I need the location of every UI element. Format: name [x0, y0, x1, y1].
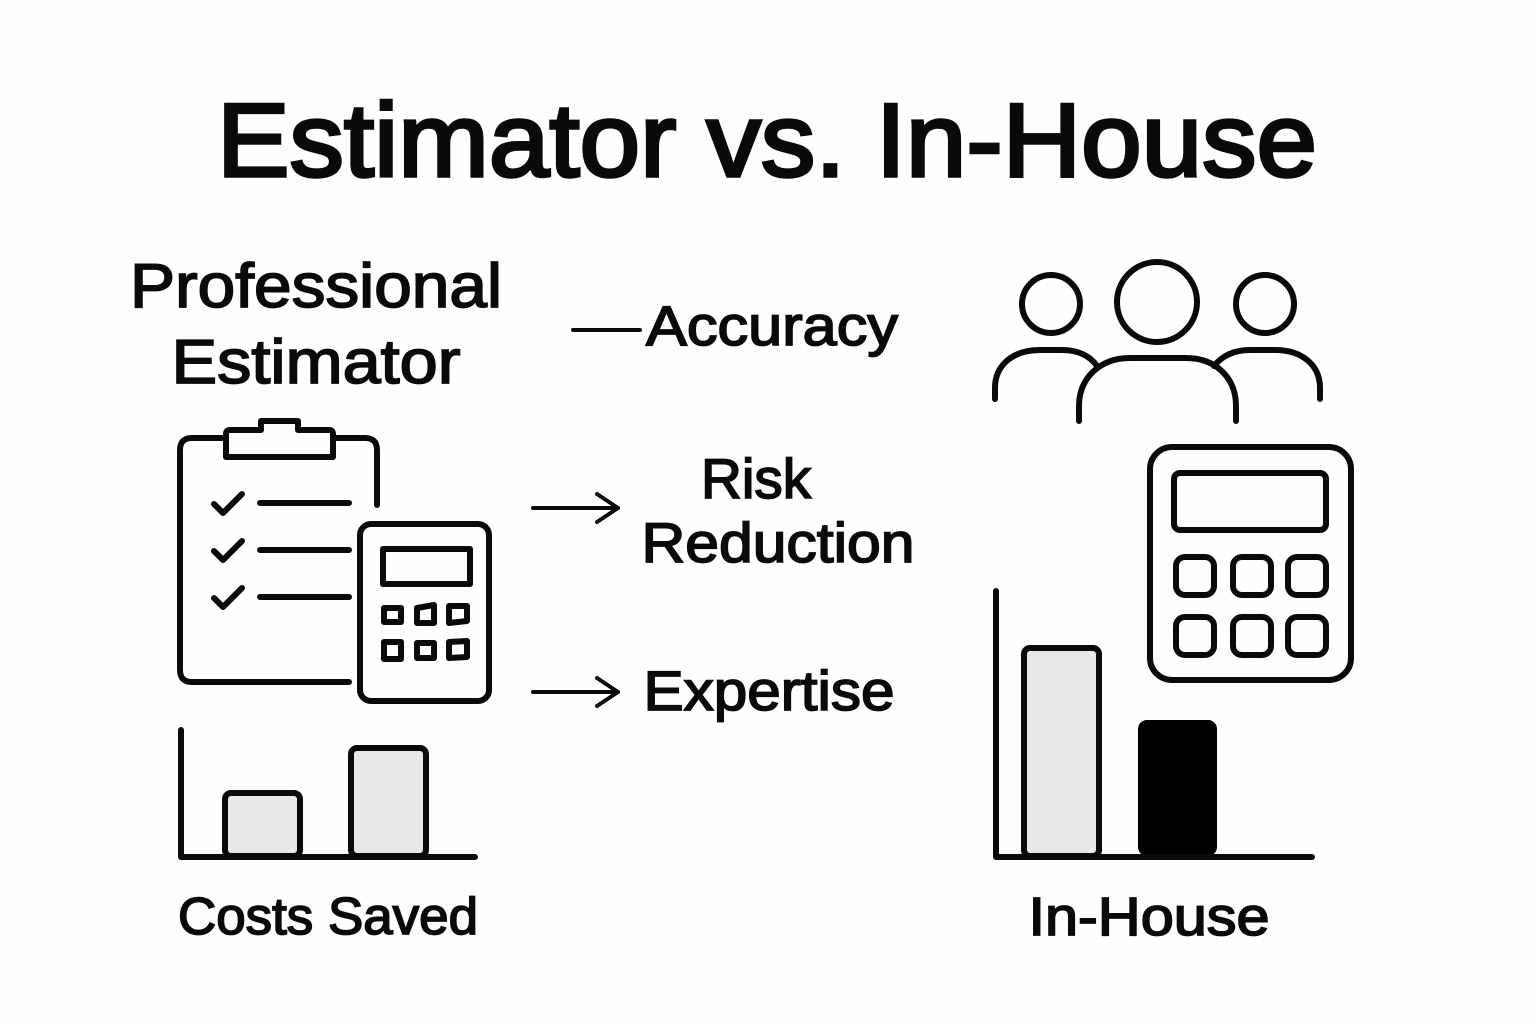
icon: team of three people — [995, 262, 1320, 421]
label: expertise: Expertise — [644, 659, 894, 722]
heading: professional estimator — [130, 252, 502, 397]
label: risk reduction: Risk — [701, 447, 812, 510]
icon: large calculator — [1150, 447, 1351, 680]
bar chart: in-house — [996, 591, 1312, 857]
label: accuracy: Accuracy — [646, 294, 898, 357]
label: risk reduction: Reduction — [642, 511, 914, 574]
arrow: expertise — [533, 678, 618, 706]
connector: accuracy — [573, 328, 640, 332]
label: costs saved: Costs Saved — [178, 888, 478, 946]
label: risk reduction — [642, 447, 914, 574]
bar chart: costs saved — [181, 730, 475, 857]
label: in-house: In-House — [1028, 887, 1270, 947]
heading: professional estimator: Estimator — [172, 328, 460, 397]
heading: professional estimator: Professional — [130, 252, 502, 321]
icon: small calculator — [360, 524, 489, 701]
title: Estimator vs. In-House — [217, 83, 1317, 199]
arrow: risk reduction — [533, 494, 618, 522]
icon: clipboard checklist — [180, 421, 377, 682]
